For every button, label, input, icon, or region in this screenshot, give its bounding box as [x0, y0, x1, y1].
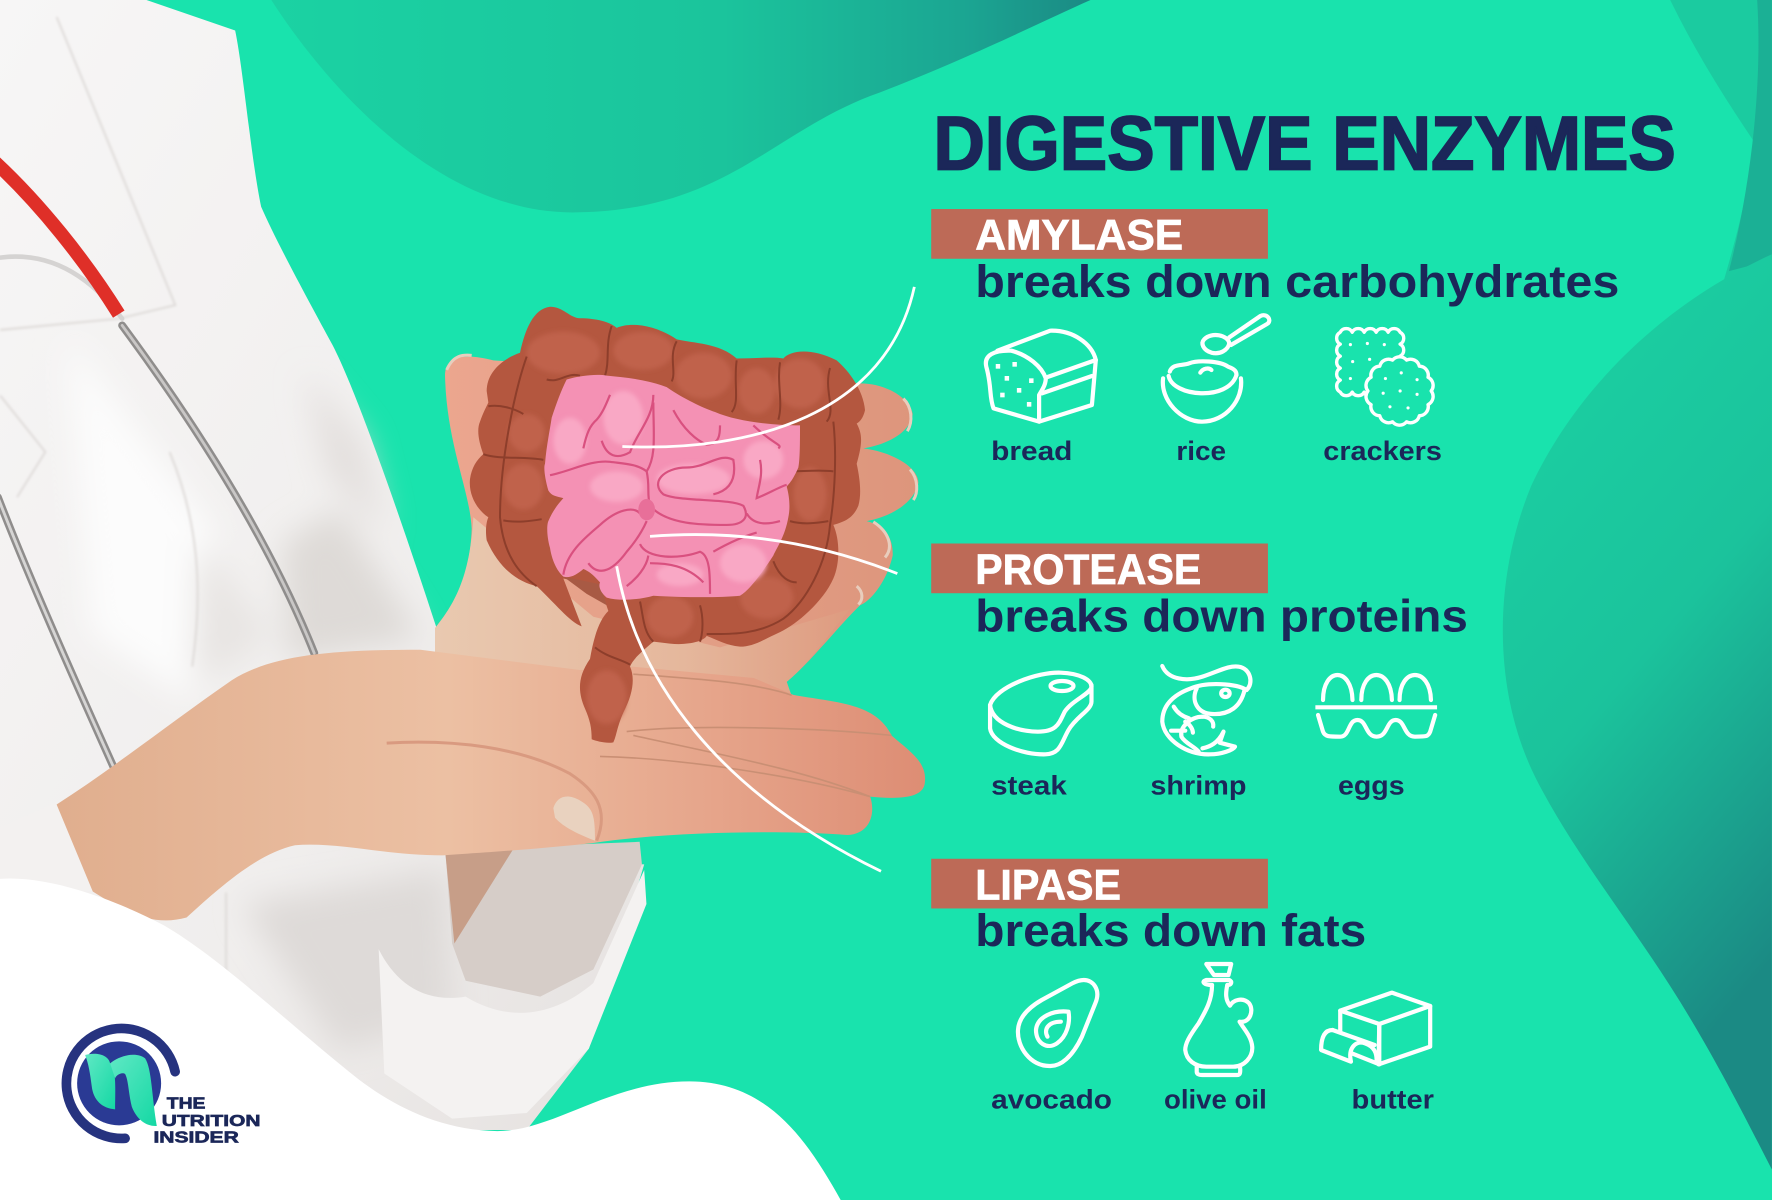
inner arm in sleeve [445, 847, 514, 944]
logo disc [77, 1041, 161, 1125]
large intestine [470, 307, 865, 743]
label: rice: rice [1176, 435, 1226, 466]
callout line: lipase [617, 566, 881, 871]
small intestine: dark centre [638, 499, 655, 520]
lipase description: breaks down fats [975, 905, 1366, 956]
logo ring [66, 1028, 175, 1138]
icon: avocado [1018, 980, 1097, 1066]
coat sleeve cuff opening [445, 842, 642, 997]
lipase label: LIPASE [975, 861, 1121, 908]
logo wordmark [153, 1095, 260, 1147]
stethoscope: right metal tube [122, 325, 314, 653]
coat collar lines [0, 17, 226, 972]
icon: crackers [1337, 329, 1433, 425]
logo: The Nutrition Insider [66, 1028, 260, 1147]
small intestine: folds [550, 395, 787, 594]
callout line: amylase [622, 287, 914, 447]
large intestine: creases [483, 326, 835, 665]
protease label: PROTEASE [975, 546, 1201, 593]
stethoscope: red tube [0, 162, 119, 314]
small intestine [544, 375, 800, 600]
coat shading [68, 339, 452, 1051]
upper hand: fingernails [447, 355, 917, 605]
logo n leaf [85, 1054, 157, 1126]
thumb nail [553, 797, 595, 841]
cuff band [379, 870, 646, 1119]
shirt cuff at wrist [0, 802, 93, 893]
icon: steak [990, 673, 1091, 754]
panel: lipase [931, 859, 1434, 1114]
label: bread: bread [991, 435, 1072, 466]
icon: bread [986, 331, 1096, 422]
callout lines [617, 287, 914, 871]
icon: olive oil [1185, 964, 1252, 1075]
background strip: far right [1729, 0, 1772, 271]
label: butter: butter [1352, 1083, 1434, 1114]
icon: shrimp [1162, 666, 1250, 754]
lipase label bar [931, 859, 1268, 908]
panel: amylase [931, 209, 1619, 466]
label: olive oil: olive oil [1164, 1083, 1267, 1114]
label: shrimp: shrimp [1150, 769, 1246, 800]
protease label bar [931, 544, 1268, 593]
amylase description: breaks down carbohydrates [975, 256, 1619, 307]
protease description: breaks down proteins [975, 591, 1468, 642]
icon: butter [1321, 993, 1430, 1064]
logo wordmark: UTRITION [162, 1113, 260, 1130]
upper hand: palm shading [435, 517, 850, 701]
amylase label bar [931, 209, 1268, 259]
amylase label: AMYLASE [975, 212, 1183, 259]
background blob: top [271, 0, 1091, 212]
stethoscope: grey tube behind collar [0, 257, 122, 319]
icon: rice [1163, 315, 1269, 422]
label: steak: steak [991, 769, 1068, 800]
shadow under small intestine [563, 577, 607, 605]
lower hand: finger creases and thumb [387, 674, 892, 841]
background blob: right [1503, 254, 1772, 1169]
lower hand [57, 650, 925, 920]
icon: eggs [1315, 675, 1437, 737]
stethoscope: right metal highlight [122, 325, 314, 653]
background blob: top right corner [1670, 0, 1772, 339]
upper hand [435, 355, 918, 701]
callout line: protease [650, 535, 897, 574]
title: DIGESTIVE ENZYMES [933, 101, 1676, 186]
intestines model [470, 307, 865, 743]
logo wordmark: THE [167, 1095, 206, 1112]
logo wordmark: INSIDER [153, 1130, 239, 1147]
panel: protease [931, 544, 1468, 800]
label: eggs: eggs [1338, 769, 1405, 800]
label: avocado: avocado [991, 1083, 1112, 1114]
white wave at bottom [0, 879, 842, 1200]
stethoscope [0, 162, 314, 766]
stethoscope: left metal highlight [0, 497, 113, 766]
large intestine: lighter segments [503, 332, 827, 724]
label: crackers: crackers [1323, 435, 1442, 466]
doctor's white coat [0, 0, 644, 1130]
stethoscope: left metal tube [0, 497, 113, 766]
small intestine: highlights [553, 391, 783, 586]
